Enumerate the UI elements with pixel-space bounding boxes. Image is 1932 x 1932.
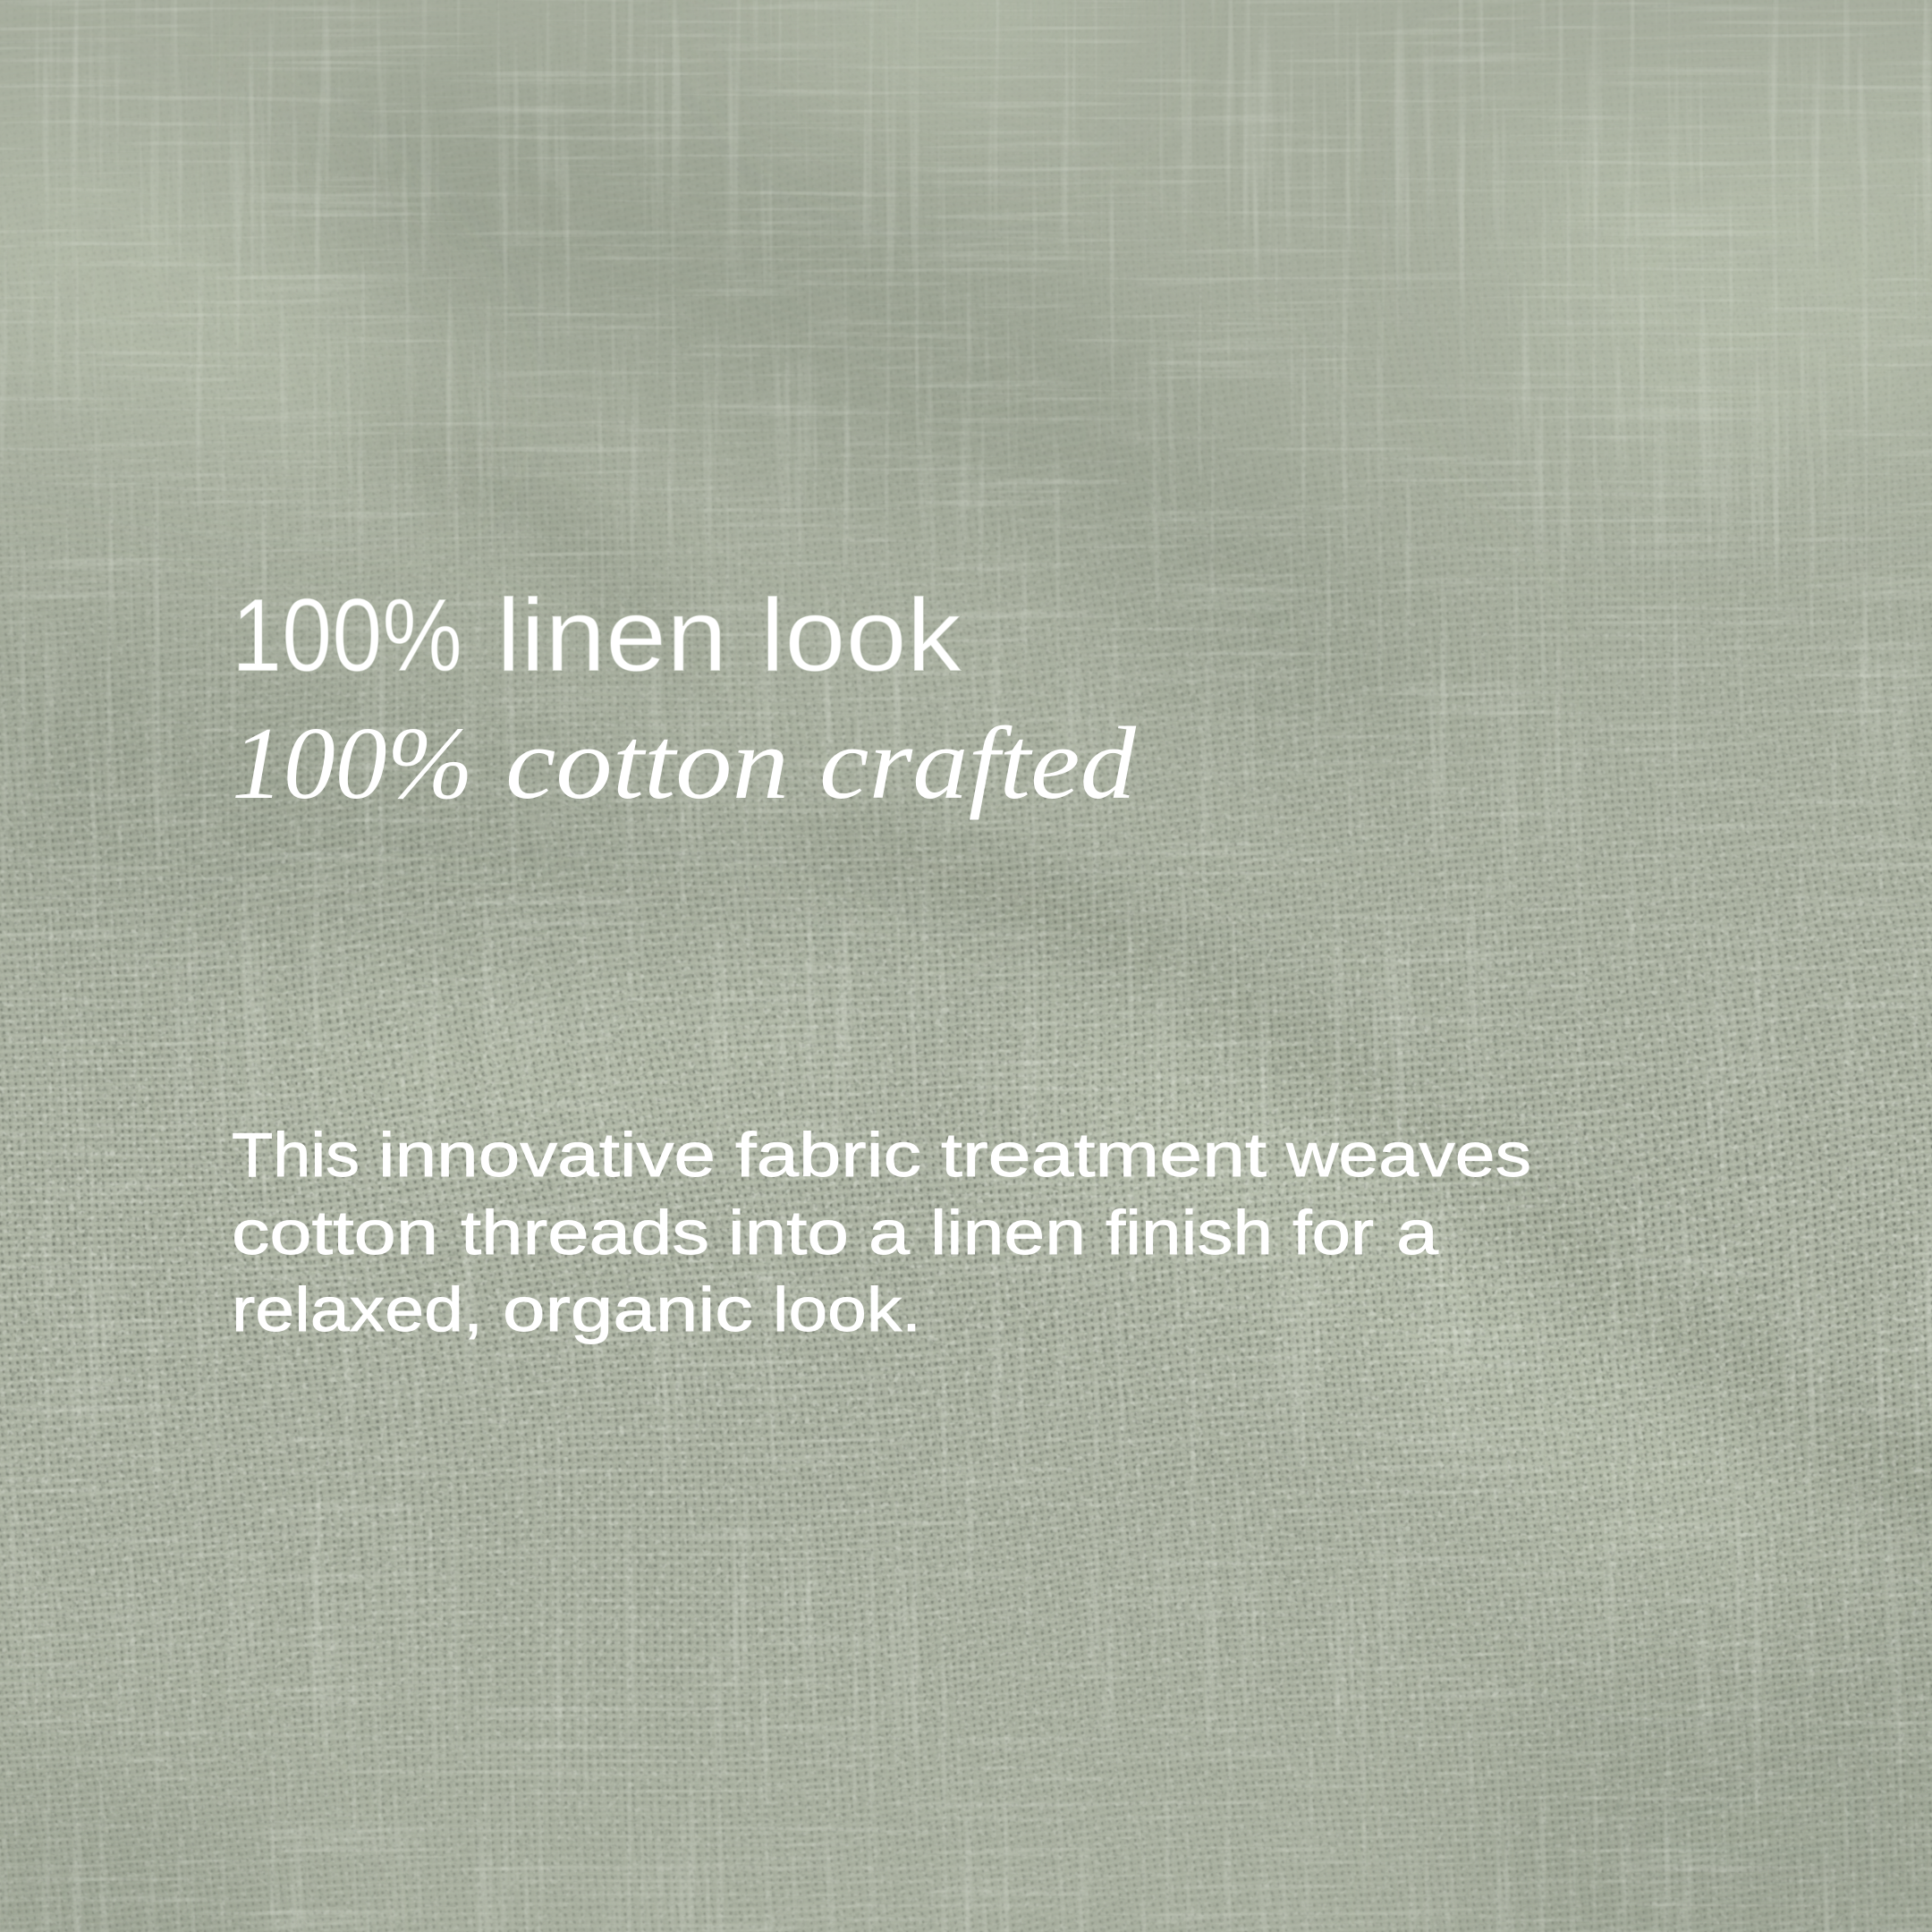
heading line 1: 100% [232,577,462,693]
body line 2: for [1292,1198,1374,1267]
heading line 2 [232,707,1137,821]
body line 3: look. [773,1275,921,1344]
body line 1 [232,1120,1531,1190]
body line 2: into [728,1198,849,1267]
body line 2: a [869,1198,910,1267]
body line 1: This [232,1120,360,1190]
body line 3: relaxed, [232,1275,483,1344]
body line 2: a [1396,1198,1438,1267]
body line 1: treatment [941,1120,1267,1190]
body line 2: cotton [232,1198,438,1267]
heading line 1: look [760,577,962,693]
body line 3 [232,1275,921,1344]
body line 3: organic [503,1275,753,1344]
heading line 2: 100% [232,707,473,821]
fabric folds: sharp diagonal crease [376,420,1932,1512]
body line 2 [232,1198,1438,1267]
heading line 2: cotton [505,707,789,821]
body line 1: innovative [378,1120,716,1190]
heading line 2: crafted [819,707,1137,821]
body text [232,1120,1531,1344]
body line 2: linen [930,1198,1086,1267]
body line 1: fabric [735,1120,921,1190]
heading line 1 [232,577,962,693]
heading [232,577,1137,821]
body line 1: weaves [1285,1120,1531,1190]
heading line 1: linen [496,577,727,693]
body line 2: threads [461,1198,709,1267]
body line 2: finish [1106,1198,1273,1267]
